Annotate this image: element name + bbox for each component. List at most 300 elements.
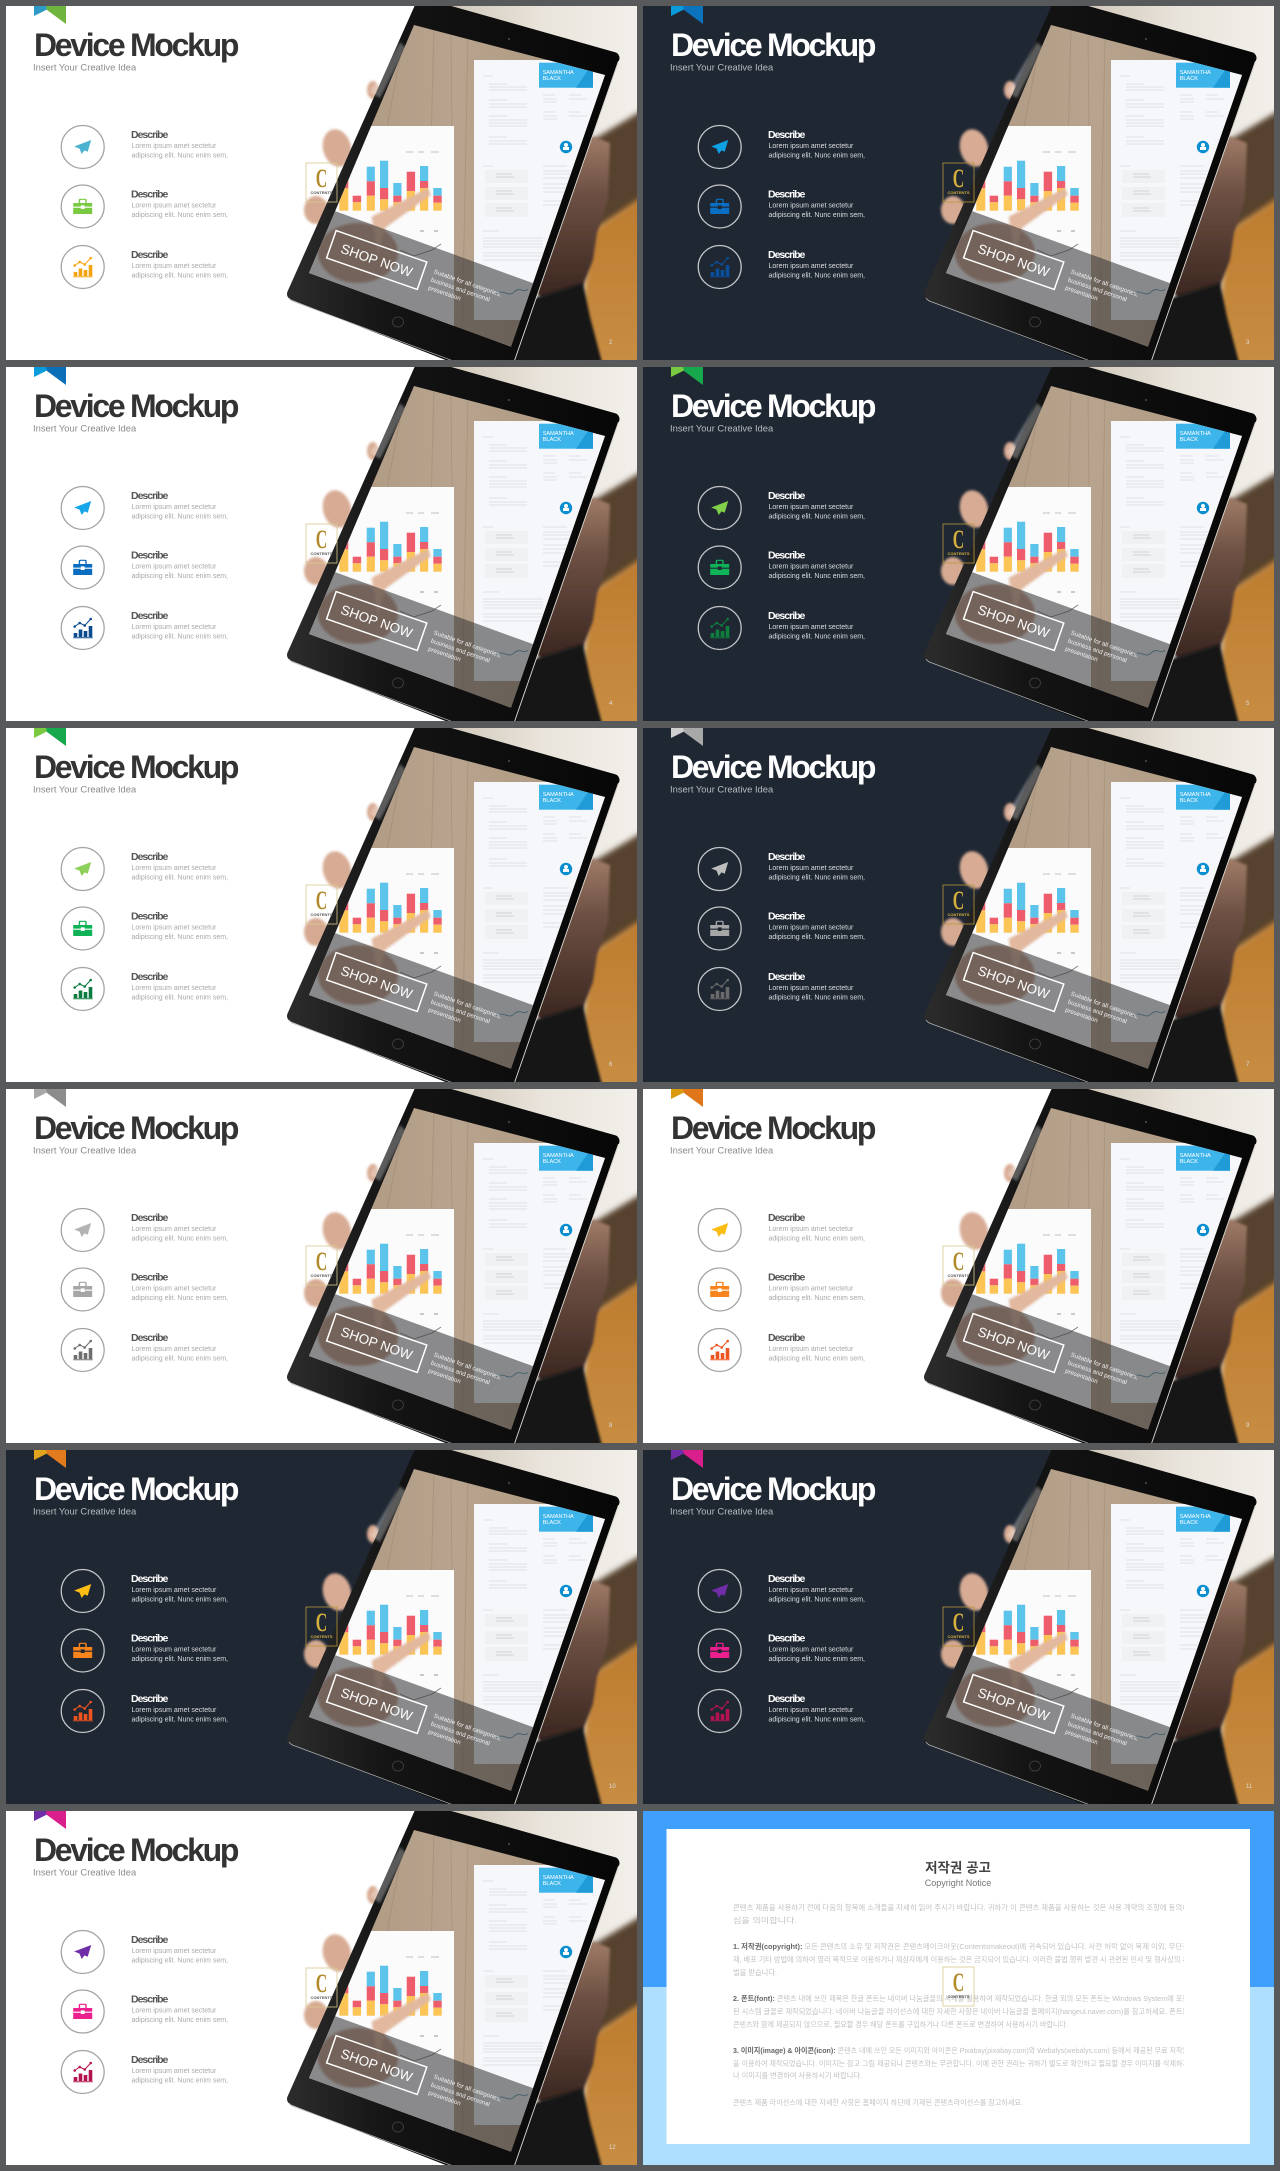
- notice body: 콘텐츠 제품을 사용하기 전에 다음의 항목에 소개들을 자세히 읽어 주시기 바랍니다. 귀하가 이 콘텐츠 제품을 사용하는 것은 사용 계약의 조항에 동의하: [733, 1902, 1189, 1912]
- tablet photo: BLACK: [543, 1159, 561, 1165]
- item: plane: Describe: [131, 1934, 169, 1946]
- item: growth chart: adipiscing elit. Nunc enim sem,: [768, 272, 865, 280]
- item: plane: Lorem ipsum amet sectetur: [768, 143, 853, 150]
- tablet photo: [926, 1079, 1280, 1459]
- page number: 5: [1246, 701, 1250, 707]
- notice body: 을 이용하여 제작되었습니다. 이미지는 참고 그림 제공되나 콘텐츠와는 무관합니다. 이에 관한 권리는 귀하가 별도로 확인하고 필요할 경우 이미지를 삭제하거: [733, 2058, 1189, 2068]
- item: briefcase: adipiscing elit. Nunc enim sem,: [132, 1295, 228, 1302]
- page number: 8: [609, 1423, 613, 1429]
- title: Device Mockup: [34, 1471, 239, 1507]
- tablet photo: SHOP NOW: [339, 1324, 415, 1363]
- logo stamp: C: [316, 525, 327, 554]
- tablet photo: presentation: [427, 1729, 462, 1747]
- subtitle: Insert Your Creative Idea: [670, 1144, 774, 1156]
- tablet photo: Suitable for all categories,: [433, 2074, 502, 2103]
- item: briefcase: Describe: [131, 1994, 169, 2006]
- tablet photo: BLACK: [1180, 1520, 1198, 1526]
- ribbon: [671, 728, 703, 746]
- item: briefcase: Lorem ipsum amet sectetur: [768, 1286, 853, 1292]
- logo stamp: C: [316, 1969, 327, 1998]
- logo stamp: CONTENTS: [310, 1273, 333, 1278]
- logo stamp: [943, 163, 974, 202]
- ribbon: [34, 1811, 66, 1829]
- subtitle: Insert Your Creative Idea: [33, 62, 137, 72]
- tablet photo: business and personal: [1067, 999, 1128, 1025]
- logo stamp: CONTENTS: [948, 1994, 970, 1999]
- tablet photo: business and personal: [1067, 1360, 1128, 1386]
- title: Device Mockup: [34, 1832, 239, 1868]
- tablet photo: Suitable for all categories,: [433, 269, 502, 298]
- item: briefcase: adipiscing elit. Nunc enim sem,: [132, 1656, 228, 1663]
- item: growth chart: [698, 968, 865, 1010]
- item: plane: Lorem ipsum amet sectetur: [132, 1948, 216, 1955]
- item: growth chart: adipiscing elit. Nunc enim sem,: [768, 994, 865, 1002]
- item: growth chart: [61, 968, 228, 1010]
- item: growth chart: [61, 1328, 228, 1372]
- title: Device Mockup: [34, 749, 239, 785]
- item: plane: [61, 1208, 228, 1252]
- item: plane: Lorem ipsum amet sectetur: [132, 504, 216, 511]
- tablet photo: presentation: [1064, 285, 1099, 303]
- logo stamp: C: [953, 1968, 964, 1997]
- item: briefcase: Describe: [768, 550, 806, 562]
- logo stamp: [306, 1968, 337, 2007]
- item: briefcase: [61, 1990, 228, 2033]
- tablet photo: Suitable for all categories,: [1070, 269, 1139, 298]
- panel: slide 10 dark orange: [6, 1440, 646, 1820]
- tablet photo: SHOP NOW: [339, 2046, 415, 2085]
- notice subtitle: Copyright Notice: [925, 1878, 991, 1888]
- item: plane: Lorem ipsum amet sectetur: [768, 1587, 853, 1594]
- tablet photo: SHOP NOW: [976, 602, 1052, 641]
- item: briefcase: Lorem ipsum amet sectetur: [132, 2008, 216, 2014]
- page number: 10: [609, 1784, 616, 1790]
- item: plane: [698, 1208, 865, 1252]
- logo stamp: C: [953, 1608, 964, 1637]
- page number: 9: [1246, 1423, 1250, 1429]
- logo stamp: CONTENTS: [948, 1273, 970, 1278]
- item: growth chart: Lorem ipsum amet sectetur: [768, 985, 853, 992]
- item: growth chart: Describe: [131, 971, 169, 983]
- item: growth chart: Lorem ipsum amet sectetur: [132, 985, 216, 992]
- tablet photo: presentation: [1064, 1729, 1099, 1747]
- subtitle: Insert Your Creative Idea: [33, 1866, 137, 1878]
- title: Device Mockup: [671, 749, 876, 785]
- tablet photo: presentation: [427, 646, 462, 664]
- tablet photo: BLACK: [543, 798, 561, 804]
- item: plane: adipiscing elit. Nunc enim sem,: [132, 514, 228, 520]
- item: briefcase: [698, 1268, 865, 1311]
- item: growth chart: adipiscing elit. Nunc enim sem,: [132, 1716, 228, 1724]
- ribbon: [34, 367, 66, 385]
- item: growth chart: Lorem ipsum amet sectetur: [132, 1346, 216, 1353]
- item: growth chart: Describe: [768, 249, 806, 261]
- tablet photo: SHOP NOW: [976, 963, 1052, 1002]
- item: briefcase: Lorem ipsum amet sectetur: [768, 924, 853, 932]
- item: plane: Describe: [131, 1573, 169, 1585]
- notice body: 1. 저작권(copyright): 모든 콘텐츠의 소유 및 저작권은 콘텐츠메이크아웃(Contentsmakeout)에 귀속되어 있습니다. 사전 허락 없이 복제 이외, 무단전: [733, 1941, 1189, 1951]
- panel: slide 6 light green: [6, 718, 646, 1098]
- tablet photo: [926, 1440, 1280, 1820]
- item: briefcase: Lorem ipsum amet sectetur: [768, 1646, 853, 1654]
- logo stamp: [306, 1246, 337, 1285]
- tablet photo: BLACK: [543, 1881, 561, 1887]
- item: briefcase: Describe: [768, 910, 806, 922]
- ribbon: [34, 728, 66, 746]
- item: growth chart: [61, 246, 228, 288]
- subtitle: Insert Your Creative Idea: [33, 784, 137, 794]
- panel: slide 8 light gray: [6, 1079, 646, 1459]
- tablet photo: BLACK: [1180, 798, 1198, 804]
- item: plane: adipiscing elit. Nunc enim sem,: [132, 874, 228, 882]
- item: plane: adipiscing elit. Nunc enim sem,: [768, 874, 865, 882]
- item: growth chart: [61, 606, 228, 650]
- item: briefcase: [61, 1268, 228, 1311]
- item: briefcase: [61, 1629, 228, 1672]
- item: briefcase: Describe: [131, 1632, 169, 1644]
- item: plane: Describe: [768, 1573, 806, 1585]
- item: plane: Lorem ipsum amet sectetur: [132, 143, 216, 150]
- page number: 7: [1246, 1062, 1250, 1068]
- item: briefcase: Lorem ipsum amet sectetur: [132, 924, 216, 932]
- item: plane: [698, 848, 865, 890]
- logo stamp: CONTENTS: [310, 912, 333, 917]
- notice body: 콘텐츠 제품 라이선스에 대한 자세한 사항은 홈페이지 하단에 기재된 콘텐츠라이선스를 참고하세요.: [733, 2097, 1023, 2107]
- item: plane: [698, 1570, 865, 1612]
- subtitle: Insert Your Creative Idea: [33, 422, 137, 434]
- item: briefcase: [698, 1629, 865, 1672]
- ribbon: [671, 367, 703, 385]
- logo stamp: C: [316, 1608, 327, 1637]
- item: growth chart: Describe: [768, 1332, 806, 1344]
- item: plane: Describe: [768, 851, 806, 863]
- tablet photo: Suitable for all categories,: [433, 630, 502, 659]
- panel: slide 7 dark gray: [643, 718, 1280, 1098]
- tablet photo: SAMANTHA: [543, 70, 574, 76]
- panel: slide 9 light orange: [643, 1079, 1280, 1459]
- item: growth chart: Describe: [131, 1332, 169, 1344]
- tablet photo: Suitable for all categories,: [433, 991, 502, 1020]
- tablet photo: SHOP NOW: [339, 1685, 415, 1724]
- item: growth chart: adipiscing elit. Nunc enim sem,: [768, 1716, 865, 1724]
- item: growth chart: Lorem ipsum amet sectetur: [132, 624, 216, 631]
- tablet photo: BLACK: [543, 1520, 561, 1526]
- logo stamp: [306, 1607, 337, 1646]
- item: plane: adipiscing elit. Nunc enim sem,: [132, 1236, 228, 1242]
- logo stamp: C: [953, 886, 964, 915]
- item: growth chart: Describe: [131, 2054, 169, 2066]
- ribbon: [34, 1089, 66, 1107]
- tablet photo: presentation: [1064, 1007, 1099, 1025]
- item: growth chart: Describe: [131, 610, 169, 622]
- tablet photo: business and personal: [1067, 1721, 1128, 1747]
- logo stamp: CONTENTS: [310, 1995, 333, 2000]
- item: growth chart: Lorem ipsum amet sectetur: [132, 2068, 216, 2075]
- tablet photo: business and personal: [1067, 638, 1128, 664]
- tablet photo: BLACK: [543, 76, 561, 82]
- item: growth chart: Describe: [131, 1693, 169, 1705]
- item: growth chart: adipiscing elit. Nunc enim sem,: [132, 2078, 228, 2084]
- notice body: 나 이미지를 변경하여 사용하시기 바랍니다.: [733, 2070, 862, 2080]
- panel: slide 3 dark blue: [643, 0, 1280, 376]
- item: plane: Describe: [768, 1212, 806, 1224]
- logo stamp: CONTENTS: [948, 912, 970, 917]
- item: briefcase: adipiscing elit. Nunc enim sem,: [768, 1295, 865, 1302]
- page number: 3: [1246, 340, 1250, 346]
- item: plane: Lorem ipsum amet sectetur: [132, 1226, 216, 1233]
- panel: slide 12 light magenta: [6, 1801, 646, 2171]
- item: plane: Lorem ipsum amet sectetur: [768, 1226, 853, 1233]
- tablet photo: BLACK: [1180, 76, 1198, 82]
- item: briefcase: [698, 907, 865, 950]
- tablet photo: BLACK: [543, 437, 561, 443]
- title: Device Mockup: [34, 27, 239, 63]
- item: briefcase: adipiscing elit. Nunc enim sem,: [132, 573, 228, 580]
- item: growth chart: Describe: [131, 249, 169, 261]
- page number: 11: [1246, 1784, 1253, 1790]
- notice body: 재, 배포 기타 방법에 의하여 영리 목적으로 이용하거나 제삼자에게 이용하는 것은 금지되어 있습니다. 이러한 불법 행위 발견 시 관련된 민사 및 형사상의 처: [733, 1954, 1189, 1964]
- tablet photo: SAMANTHA: [543, 431, 574, 437]
- logo stamp: CONTENTS: [310, 551, 333, 556]
- tablet photo: SAMANTHA: [1180, 70, 1211, 76]
- subtitle: Insert Your Creative Idea: [670, 62, 774, 72]
- item: plane: [61, 848, 228, 890]
- item: plane: [698, 486, 865, 530]
- tablet photo: Suitable for all categories,: [1070, 1713, 1139, 1742]
- item: plane: adipiscing elit. Nunc enim sem,: [132, 152, 228, 160]
- item: growth chart: Lorem ipsum amet sectetur: [768, 1346, 853, 1353]
- tablet photo: business and personal: [430, 2082, 491, 2108]
- panel: copyright notice: [643, 1811, 1274, 2165]
- tablet photo: [289, 357, 646, 737]
- item: briefcase: Describe: [768, 1632, 806, 1644]
- item: growth chart: adipiscing elit. Nunc enim sem,: [132, 994, 228, 1002]
- item: briefcase: Lorem ipsum amet sectetur: [132, 1646, 216, 1654]
- item: growth chart: Describe: [768, 971, 806, 983]
- tablet photo: business and personal: [430, 638, 491, 664]
- item: briefcase: Describe: [131, 1272, 169, 1284]
- item: briefcase: Describe: [131, 188, 169, 200]
- item: briefcase: adipiscing elit. Nunc enim sem,: [768, 573, 865, 580]
- item: growth chart: [698, 606, 865, 650]
- logo stamp: [943, 885, 974, 924]
- logo stamp: C: [953, 1247, 964, 1276]
- item: growth chart: Describe: [768, 1693, 806, 1705]
- item: growth chart: [61, 1690, 228, 1732]
- tablet photo: Suitable for all categories,: [1070, 1352, 1139, 1381]
- item: growth chart: [698, 1690, 865, 1732]
- tablet photo: SHOP NOW: [339, 241, 415, 280]
- tablet photo: business and personal: [430, 999, 491, 1025]
- item: growth chart: adipiscing elit. Nunc enim sem,: [132, 1356, 228, 1362]
- tablet photo: presentation: [427, 2090, 462, 2108]
- page number: 6: [609, 1062, 613, 1068]
- item: plane: adipiscing elit. Nunc enim sem,: [132, 1596, 228, 1604]
- logo stamp: C: [316, 886, 327, 915]
- subtitle: Insert Your Creative Idea: [33, 1144, 137, 1156]
- item: briefcase: [61, 185, 228, 228]
- item: growth chart: [61, 2050, 228, 2094]
- item: growth chart: Lorem ipsum amet sectetur: [132, 1707, 216, 1714]
- subtitle: Insert Your Creative Idea: [33, 1506, 137, 1516]
- item: briefcase: Lorem ipsum amet sectetur: [132, 564, 216, 570]
- notice body: [733, 1902, 1189, 2107]
- panel: slide 4 light blue: [6, 357, 646, 737]
- item: briefcase: Describe: [768, 188, 806, 200]
- item: growth chart: Lorem ipsum amet sectetur: [768, 624, 853, 631]
- item: briefcase: Lorem ipsum amet sectetur: [132, 202, 216, 210]
- tablet photo: Suitable for all categories,: [1070, 630, 1139, 659]
- tablet photo: SHOP NOW: [976, 1324, 1052, 1363]
- item: briefcase: adipiscing elit. Nunc enim sem,: [768, 1656, 865, 1663]
- item: plane: adipiscing elit. Nunc enim sem,: [768, 514, 865, 520]
- tablet photo: [289, 1801, 646, 2171]
- ribbon: [34, 1450, 66, 1468]
- notice body: 2. 폰트(font): 콘텐츠 내에 쓰인 제목은 한글 폰트는 네이버 나눔글꼴의 서체를 활용하여 제작되었습니다. 한글 외의 모든 폰트는 Windows System에 포함: [733, 1993, 1189, 2003]
- tablet photo: SAMANTHA: [1180, 1514, 1211, 1520]
- item: growth chart: Describe: [768, 610, 806, 622]
- notice body: 콘텐츠와 함께 제공되지 않으므로, 필요할 경우 해당 폰트를 구입하거나 다른 폰트로 변경하여 사용하시기 바랍니다.: [733, 2019, 1068, 2029]
- logo stamp: C: [316, 164, 327, 193]
- item: briefcase: Describe: [131, 550, 169, 562]
- logo stamp: C: [316, 1247, 327, 1276]
- logo stamp: CONTENTS: [310, 190, 333, 195]
- item: plane: [698, 126, 865, 168]
- item: briefcase: adipiscing elit. Nunc enim sem,: [132, 212, 228, 219]
- notice body: 벌을 받습니다.: [733, 1967, 777, 1977]
- tablet photo: Suitable for all categories,: [433, 1713, 502, 1742]
- item: plane: Describe: [131, 490, 169, 502]
- tablet photo: SHOP NOW: [976, 241, 1052, 280]
- item: briefcase: Lorem ipsum amet sectetur: [768, 202, 853, 210]
- title: Device Mockup: [671, 27, 876, 63]
- item: plane: [61, 486, 228, 530]
- panel: slide 2 light blue-green: [6, 0, 646, 376]
- tablet photo: BLACK: [1180, 437, 1198, 443]
- item: growth chart: adipiscing elit. Nunc enim sem,: [132, 272, 228, 280]
- tablet photo: [926, 718, 1280, 1098]
- logo stamp: [943, 1967, 974, 2006]
- tablet photo: presentation: [427, 1368, 462, 1386]
- panel: slide 11 dark magenta: [643, 1440, 1280, 1820]
- tablet photo: SHOP NOW: [339, 963, 415, 1002]
- item: plane: Lorem ipsum amet sectetur: [132, 865, 216, 872]
- item: briefcase: Describe: [131, 910, 169, 922]
- item: growth chart: [698, 1328, 865, 1372]
- tablet photo: SAMANTHA: [543, 1153, 574, 1159]
- item: briefcase: [698, 546, 865, 589]
- tablet photo: SAMANTHA: [543, 792, 574, 798]
- item: plane: Lorem ipsum amet sectetur: [132, 1587, 216, 1594]
- ribbon: [671, 1089, 703, 1107]
- tablet photo: SAMANTHA: [543, 1514, 574, 1520]
- item: growth chart: Lorem ipsum amet sectetur: [768, 1707, 853, 1714]
- item: briefcase: Lorem ipsum amet sectetur: [768, 564, 853, 570]
- item: briefcase: [61, 546, 228, 589]
- logo stamp: [943, 1607, 974, 1646]
- title: Device Mockup: [34, 1110, 239, 1146]
- tablet photo: SAMANTHA: [1180, 792, 1211, 798]
- tablet photo: SAMANTHA: [1180, 431, 1211, 437]
- item: plane: [61, 1930, 228, 1974]
- item: briefcase: adipiscing elit. Nunc enim sem,: [768, 934, 865, 941]
- tablet photo: BLACK: [1180, 1159, 1198, 1165]
- logo stamp: [306, 524, 337, 563]
- tablet photo: business and personal: [430, 1721, 491, 1747]
- item: growth chart: adipiscing elit. Nunc enim sem,: [132, 634, 228, 640]
- logo stamp: CONTENTS: [948, 1634, 970, 1639]
- ribbon: [34, 6, 66, 24]
- item: briefcase: Describe: [768, 1272, 806, 1284]
- tablet photo: [289, 1079, 646, 1459]
- logo stamp: CONTENTS: [310, 1634, 333, 1639]
- tablet photo: [289, 1440, 646, 1820]
- item: plane: adipiscing elit. Nunc enim sem,: [768, 152, 865, 160]
- tablet photo: business and personal: [1067, 277, 1128, 303]
- tablet photo: [926, 357, 1280, 737]
- tablet photo: presentation: [1064, 1368, 1099, 1386]
- item: plane: Describe: [131, 851, 169, 863]
- notice body: 3. 이미지(image) & 아이콘(icon): 콘텐츠 내에 쓰인 모든 이미지와 아이콘은 Pixabay(pixabay.com)와 Webalys(webalys.com) 등에서 제공된 무료 저작물: [733, 2045, 1189, 2055]
- item: plane: adipiscing elit. Nunc enim sem,: [768, 1596, 865, 1604]
- item: plane: Lorem ipsum amet sectetur: [768, 865, 853, 872]
- item: briefcase: adipiscing elit. Nunc enim sem,: [768, 212, 865, 219]
- page number: 12: [609, 2145, 616, 2151]
- tablet photo: SHOP NOW: [339, 602, 415, 641]
- item: briefcase: Lorem ipsum amet sectetur: [132, 1286, 216, 1292]
- logo stamp: C: [953, 164, 964, 193]
- tablet photo: presentation: [1064, 646, 1099, 664]
- item: plane: Lorem ipsum amet sectetur: [768, 504, 853, 511]
- tablet photo: [289, 0, 646, 376]
- tablet photo: [926, 0, 1280, 376]
- subtitle: Insert Your Creative Idea: [670, 422, 774, 434]
- subtitle: Insert Your Creative Idea: [670, 1506, 774, 1516]
- ribbon: [671, 6, 703, 24]
- item: plane: Describe: [768, 490, 806, 502]
- tablet photo: presentation: [427, 285, 462, 303]
- page number: 4: [609, 701, 613, 707]
- item: plane: [61, 1570, 228, 1612]
- tablet photo: SAMANTHA: [543, 1875, 574, 1881]
- logo stamp: [306, 163, 337, 202]
- tablet photo: business and personal: [430, 1360, 491, 1386]
- tablet photo: SHOP NOW: [976, 1685, 1052, 1724]
- notice body: 심을 의미합니다.: [733, 1915, 797, 1925]
- title: Device Mockup: [671, 388, 876, 424]
- item: plane: Describe: [131, 1212, 169, 1224]
- title: Device Mockup: [671, 1110, 876, 1146]
- ribbon: [671, 1450, 703, 1468]
- tablet photo: business and personal: [430, 277, 491, 303]
- tablet photo: SAMANTHA: [1180, 1153, 1211, 1159]
- tablet photo: [289, 718, 646, 1098]
- logo stamp: [943, 1246, 974, 1285]
- item: briefcase: [698, 185, 865, 228]
- tablet photo: Suitable for all categories,: [1070, 991, 1139, 1020]
- item: briefcase: adipiscing elit. Nunc enim sem,: [132, 934, 228, 941]
- item: growth chart: Lorem ipsum amet sectetur: [132, 263, 216, 270]
- page number: 2: [609, 340, 613, 346]
- logo stamp: C: [953, 525, 964, 554]
- item: growth chart: [698, 246, 865, 288]
- subtitle: Insert Your Creative Idea: [670, 784, 774, 794]
- logo stamp: [306, 885, 337, 924]
- item: growth chart: adipiscing elit. Nunc enim sem,: [768, 1356, 865, 1362]
- logo stamp: CONTENTS: [948, 551, 970, 556]
- notice title: 저작권 공고: [925, 1861, 991, 1876]
- item: plane: Describe: [131, 129, 169, 141]
